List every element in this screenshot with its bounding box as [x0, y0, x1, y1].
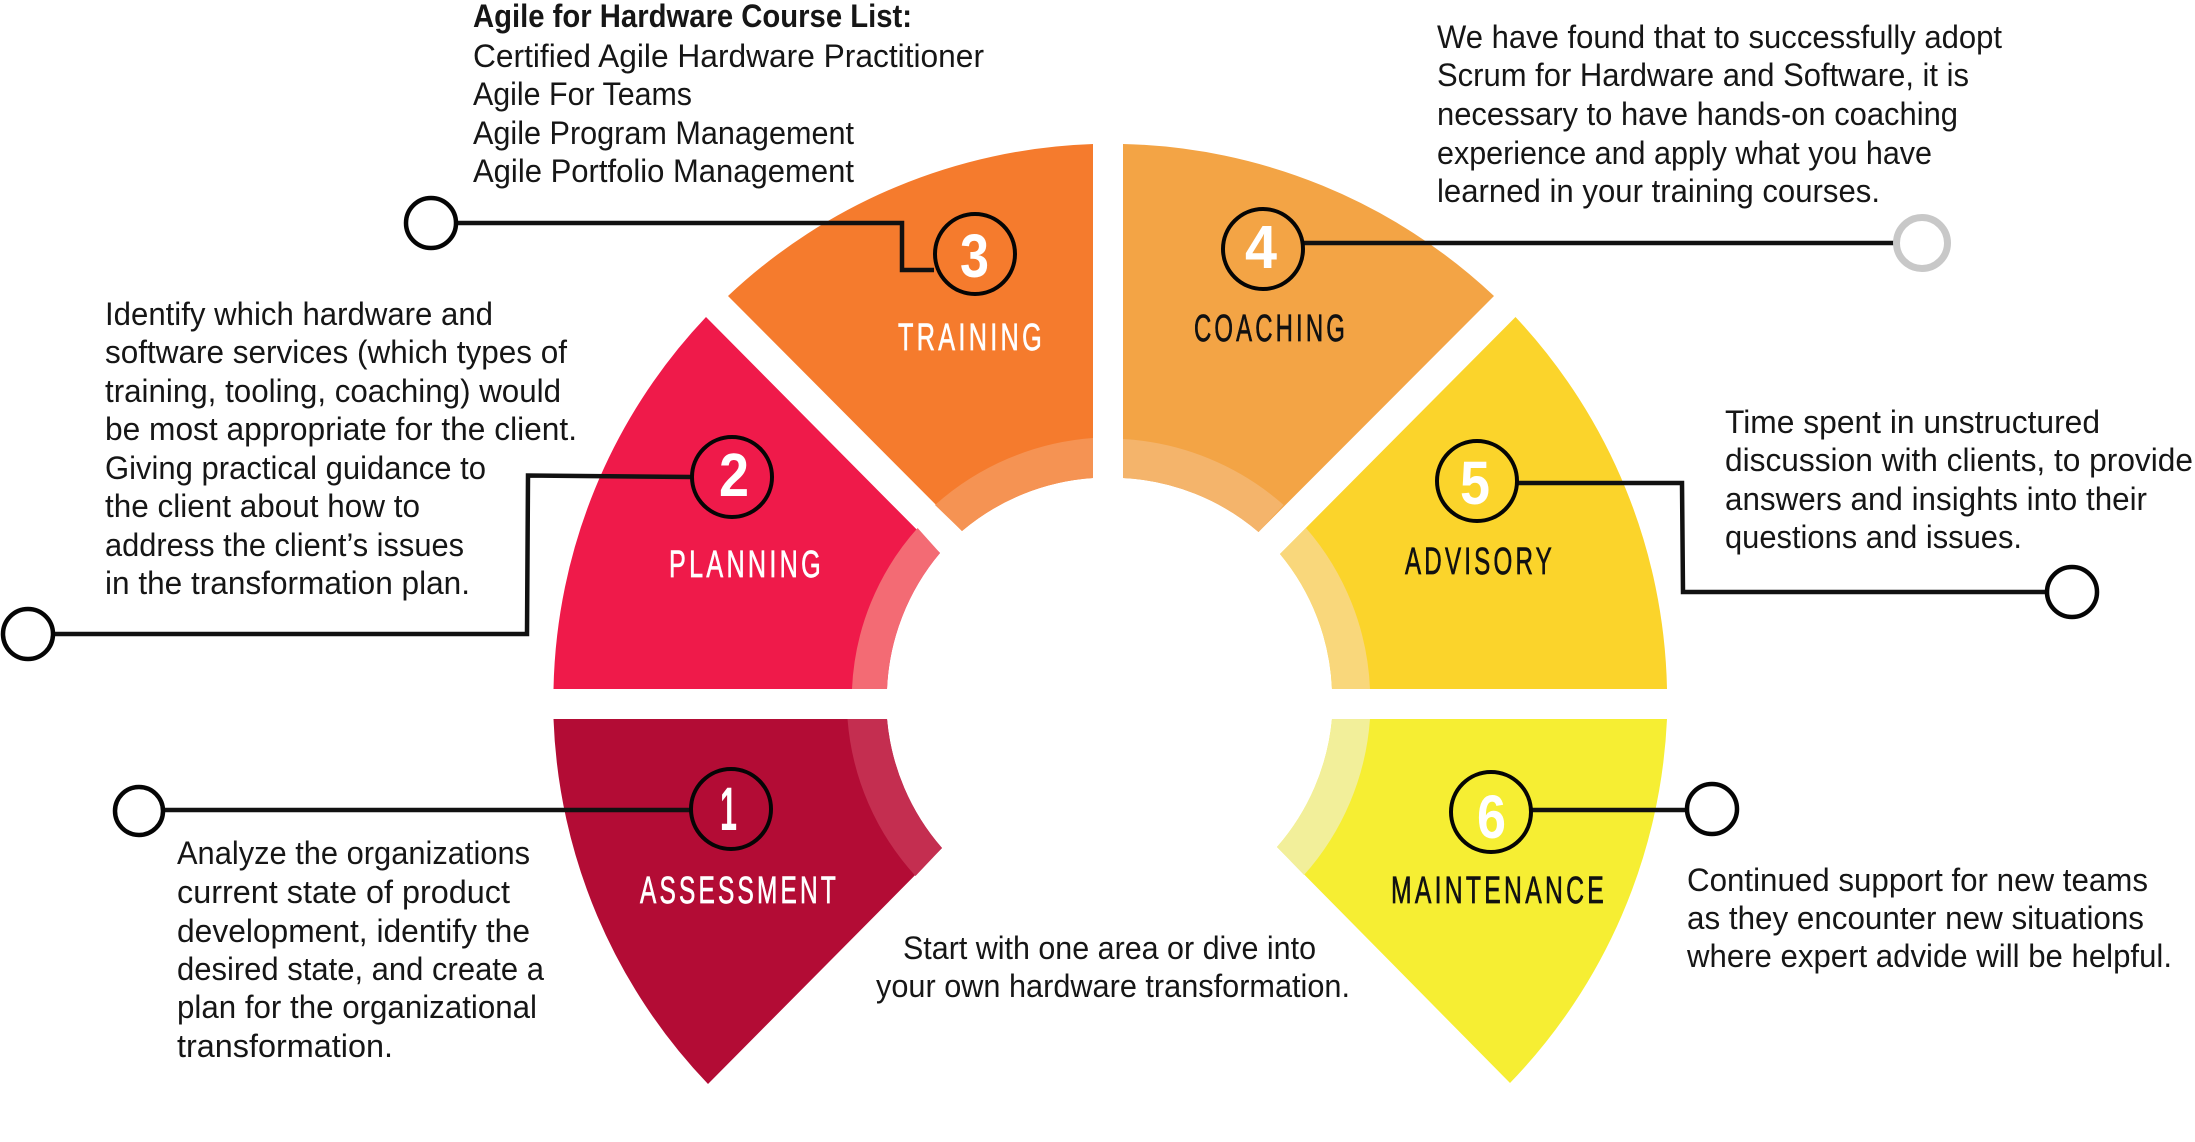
text block: course list: Agile For Teams	[473, 76, 692, 112]
text block: assessment description: desired state, and create a	[177, 951, 544, 987]
number badge 2	[692, 437, 772, 517]
connector: maintenance	[1532, 784, 1737, 834]
label: planning: PLANNING	[669, 544, 824, 586]
text block: course list: Certified Agile Hardware Practitioner	[473, 38, 984, 74]
text block: course list	[473, 0, 984, 189]
connector: advisory	[1517, 483, 2097, 617]
text block: coaching description: Scrum for Hardware and Software, it is	[1437, 57, 1969, 93]
text block: coaching description: We have found that to successfully adopt	[1437, 19, 2002, 55]
label: assessment: ASSESSMENT	[640, 870, 839, 912]
text block: maintenance description: Continued support for new teams	[1687, 862, 2148, 898]
text block: advisory description: Time spent in unstructured	[1725, 404, 2100, 440]
text block: course list: Agile Portfolio Management	[473, 153, 854, 189]
connector: planning	[3, 476, 692, 659]
number badge 3	[935, 214, 1015, 294]
number badge 5	[1437, 441, 1517, 521]
text block: planning description: address the client’s issues	[105, 527, 464, 563]
text block: planning description	[105, 296, 577, 601]
connector: assessment	[115, 787, 691, 835]
text block: course list: Agile Program Management	[473, 115, 854, 151]
text block: center message	[876, 930, 1350, 1004]
connector: training	[406, 198, 934, 270]
text block: advisory description	[1725, 404, 2193, 555]
segment: training wedge	[728, 144, 1093, 531]
number badge 5: 5	[1460, 449, 1490, 517]
number badge 1: 1	[720, 775, 737, 843]
segment: maintenance wedge	[1277, 719, 1667, 1083]
connector: coaching	[1304, 218, 1948, 268]
label: advisory: ADVISORY	[1405, 541, 1555, 583]
text block: planning description: be most appropriate for the client.	[105, 411, 577, 447]
text block: advisory description: discussion with clients, to provide	[1725, 442, 2193, 478]
label: coaching: COACHING	[1194, 308, 1348, 350]
text block: assessment description: Analyze the organizations	[177, 835, 530, 871]
text block: planning description: Giving practical guidance to	[105, 450, 486, 486]
text block: center message: your own hardware transformation.	[876, 968, 1350, 1004]
number badge 1	[691, 769, 771, 849]
label: training: TRAINING	[898, 317, 1045, 359]
segment: planning wedge	[554, 317, 940, 689]
text block: maintenance description	[1686, 862, 2172, 974]
text block: advisory description: answers and insights into their	[1725, 481, 2147, 517]
text block: assessment description: current state of product	[177, 874, 510, 910]
text block: maintenance description: where expert advide will be helpful.	[1686, 938, 2172, 974]
text block: planning description: the client about how to	[105, 488, 420, 524]
text block: planning description: Identify which hardware and	[105, 296, 493, 332]
segment: assessment wedge	[554, 719, 942, 1084]
text block: assessment description: plan for the organizational	[177, 989, 537, 1025]
text block: planning description: in the transformation plan.	[105, 565, 470, 601]
number badge 3: 3	[960, 222, 989, 290]
segment: advisory wedge	[1280, 317, 1667, 689]
text block: coaching description	[1437, 19, 2002, 209]
label: maintenance: MAINTENANCE	[1391, 870, 1607, 912]
number badge 6	[1451, 772, 1531, 852]
text block: assessment description: development, identify the	[177, 913, 530, 949]
text block: assessment description	[177, 835, 544, 1064]
text block: advisory description: questions and issues.	[1725, 519, 2022, 555]
number badge 6: 6	[1477, 783, 1506, 851]
segment: coaching wedge	[1123, 144, 1494, 532]
text block: coaching description: necessary to have hands-on coaching	[1437, 96, 1958, 132]
number badge 2: 2	[719, 441, 749, 509]
text block: assessment description: transformation.	[177, 1028, 393, 1064]
text block: coaching description: experience and apply what you have	[1437, 135, 1932, 171]
number badge 4	[1223, 209, 1303, 289]
number badge 4: 4	[1245, 213, 1277, 281]
text block: planning description: training, tooling, coaching) would	[105, 373, 561, 409]
text block: maintenance description: as they encounter new situations	[1687, 900, 2144, 936]
text block: center message: Start with one area or dive into	[903, 930, 1316, 966]
text block: coaching description: learned in your training courses.	[1437, 173, 1880, 209]
text block: planning description: software services (which types of	[105, 334, 567, 370]
